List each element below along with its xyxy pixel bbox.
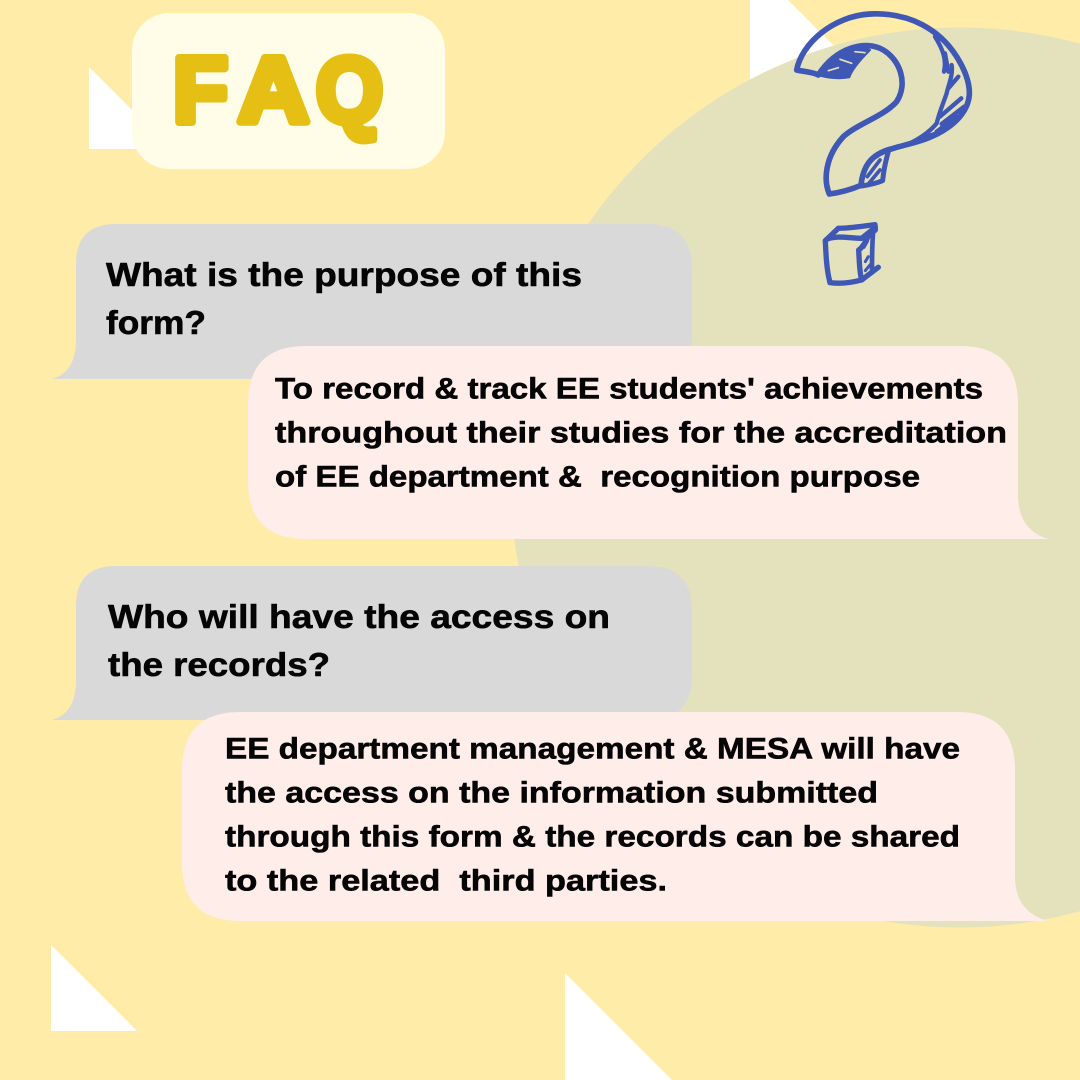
answer 1 text <box>275 372 1007 494</box>
large olive background circle <box>510 28 1080 928</box>
panel: question 2 bubble <box>52 566 692 720</box>
question 2 text: Who will have the access on <box>108 598 610 635</box>
panel: answer 1 bubble <box>248 346 1048 539</box>
title: F <box>173 38 228 142</box>
answer 1 text: of EE department & recognition purpose <box>275 460 920 494</box>
answer 2 text <box>225 732 960 898</box>
question 1 text <box>106 256 582 341</box>
answer 2 text: through this form & the records can be shared <box>225 820 960 854</box>
question 1 text: What is the purpose of this <box>106 256 582 293</box>
question mark dot <box>825 225 878 283</box>
answer 1 text: throughout their studies for the accreditation <box>275 416 1007 450</box>
answer 1 text: To record & track EE students' achievements <box>275 372 983 406</box>
question mark shading <box>818 37 964 186</box>
question mark hook outline <box>797 14 969 194</box>
title: A <box>238 38 309 142</box>
panel: FAQ title badge <box>132 13 445 169</box>
icon: hand-drawn question mark <box>797 14 969 283</box>
title <box>173 38 383 142</box>
title: Q <box>316 38 383 142</box>
answer 2 text: EE department management & MESA will have <box>225 732 960 766</box>
question 2 text <box>108 598 610 683</box>
question 2 text: the records? <box>108 646 330 683</box>
decorative white triangle: top right <box>750 0 873 85</box>
question 1 text: form? <box>106 304 206 341</box>
panel: answer 2 bubble <box>182 712 1047 921</box>
decorative white triangle: bottom left <box>51 945 137 1031</box>
decorative white triangle: bottom centre <box>565 973 672 1080</box>
answer 2 text: to the related third parties. <box>225 864 667 898</box>
panel: question 1 bubble <box>52 224 692 379</box>
decorative white triangle: top left <box>89 67 171 149</box>
answer 2 text: the access on the information submitted <box>225 776 878 810</box>
